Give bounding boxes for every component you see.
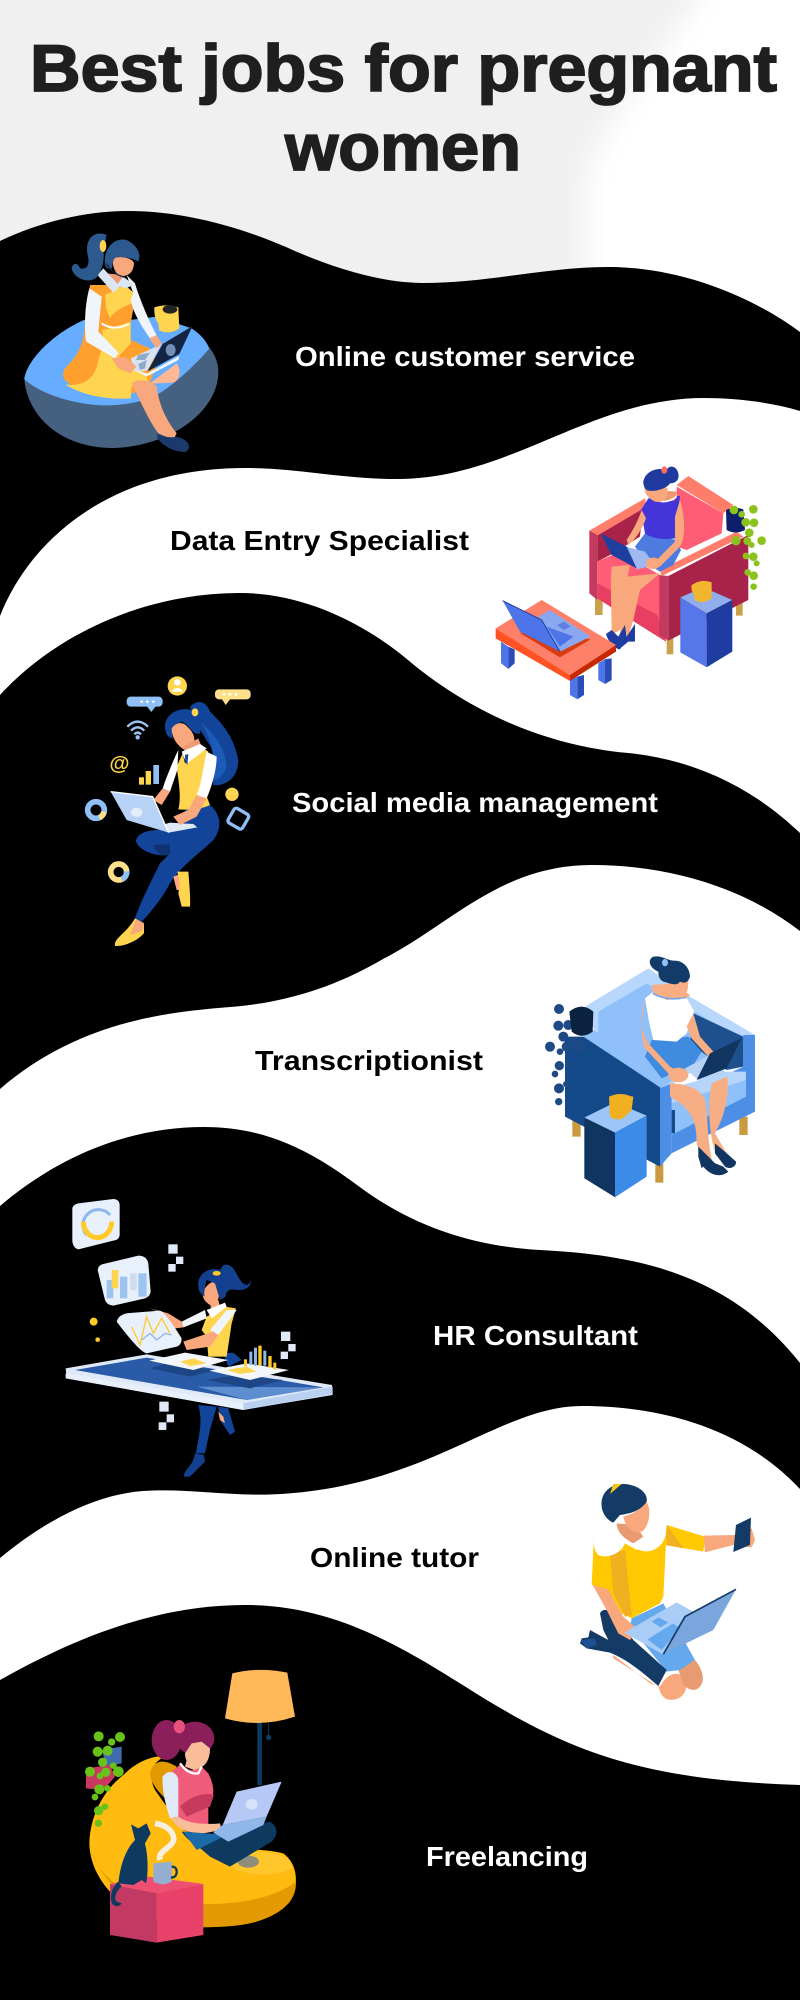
illustration: woman on blue beanbag with laptop [24,234,218,452]
title: Best jobs for pregnant [30,31,777,105]
illustration: woman on yellow beanbag with lamp, cat and plant [85,1670,296,1943]
icon: at sign: @ [109,752,129,775]
white wave band 2 [0,865,800,1363]
cat [111,1823,151,1906]
icon: decorative shapes [88,788,250,880]
gauge card [72,1199,120,1249]
yellow dots [90,1318,100,1342]
label: Social media management: Social media management [292,787,658,818]
plant leaves [85,1731,125,1827]
illustration: kneeling woman with phone and laptop [580,1484,755,1700]
plant pots [86,1747,122,1790]
woman [150,1265,251,1477]
illustration: woman with laptop and social media icons [88,676,251,946]
illustration: woman in blue armchair with laptop [545,956,755,1197]
title: women [284,110,521,184]
bar chart card [98,1256,151,1306]
figure: woman on laptop [111,702,238,946]
label: Freelancing: Freelancing [426,1841,588,1872]
side cube [110,1877,203,1943]
title [30,31,777,184]
illustration: woman at floating dashboard [66,1199,333,1477]
floating squares [159,1244,296,1430]
woman with laptop [152,1720,282,1868]
mug with steam [153,1823,177,1884]
icon: wifi [127,722,148,738]
chart tablet [117,1311,218,1353]
beanbag [89,1756,296,1927]
label: Online tutor: Online tutor [310,1542,479,1573]
mini bar chart [244,1346,276,1369]
white wave band 3 [0,1406,800,1785]
label: HR Consultant: HR Consultant [433,1320,638,1351]
illustration: woman in red armchair with table and laptop [496,466,766,699]
white wave band 1 [0,398,800,833]
dashboard platform [66,1353,333,1410]
label: Online customer service: Online customer service [295,341,635,372]
background: soft grey header wash [0,0,720,340]
icon: signal bars [139,765,159,785]
icon: chat bubbles [127,689,251,712]
icon: avatar badge [168,676,187,696]
label: Data Entry Specialist: Data Entry Specialist [170,525,469,556]
floor lamp [225,1670,295,1785]
label: Transcriptionist: Transcriptionist [255,1045,483,1076]
